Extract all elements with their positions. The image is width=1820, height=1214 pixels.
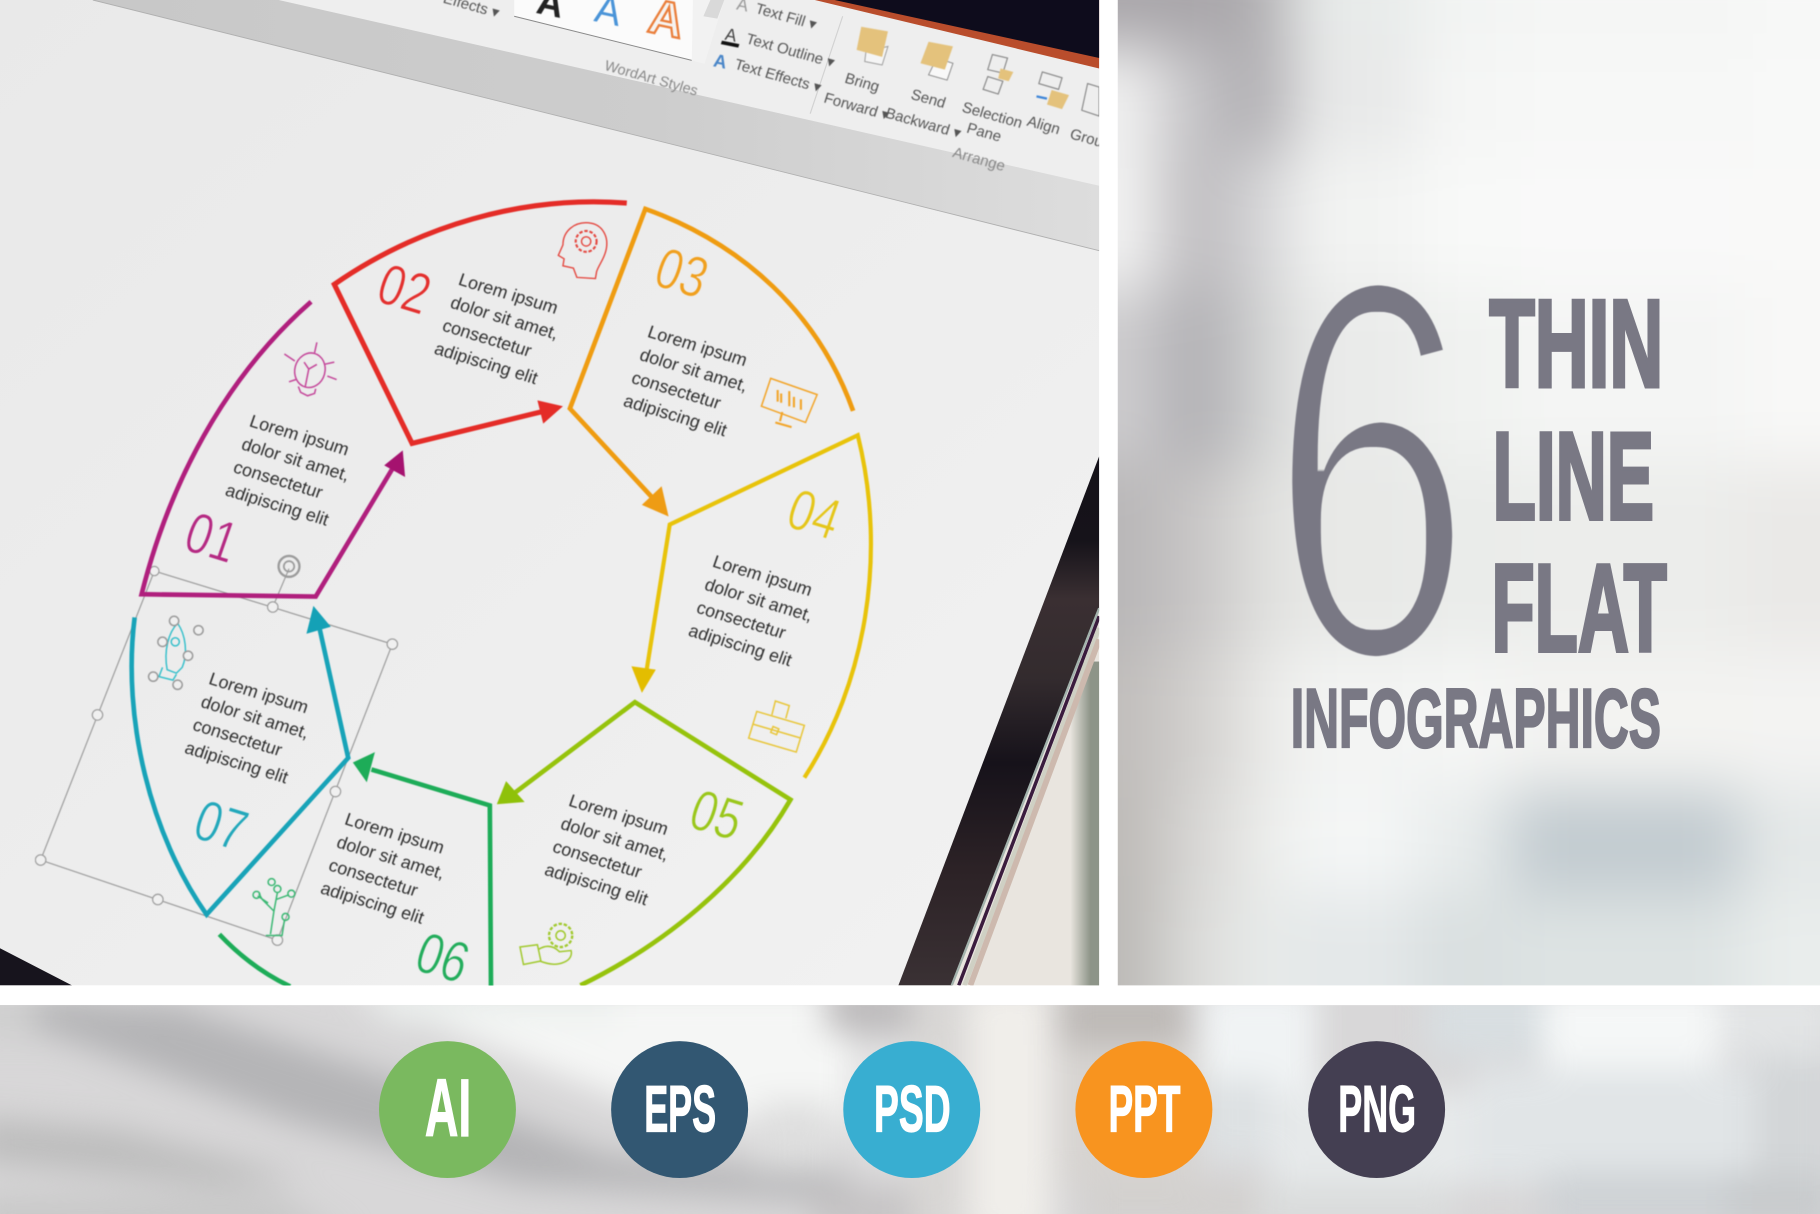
segment 07 teal: dolor sit amet, xyxy=(198,692,312,743)
segment 07 teal: 07 xyxy=(186,788,255,864)
segment 06 green: consectetur xyxy=(326,855,421,900)
segment 04 yellow: 04 xyxy=(779,477,849,553)
segment 06 green: dolor sit amet, xyxy=(334,832,448,883)
badge: AI xyxy=(379,1041,516,1178)
segment 01 magenta: adipiscing elit xyxy=(223,480,332,530)
badge: EPS xyxy=(611,1041,748,1178)
monitor bezel xyxy=(0,456,1099,987)
badge: AI: AI xyxy=(425,1063,471,1154)
segment 07 teal: Lorem ipsum xyxy=(206,668,311,717)
segment 07 teal xyxy=(132,606,348,915)
ribbon toolbar: WordArt Styles xyxy=(602,58,700,99)
badge: PPT: PPT xyxy=(1108,1073,1180,1147)
segment 07 teal: adipiscing elit xyxy=(182,738,291,787)
selection box xyxy=(35,556,398,945)
segment 05 lime: dolor sit amet, xyxy=(558,813,672,865)
cycle diagram xyxy=(35,202,871,996)
segment 02 red: consectetur xyxy=(440,315,534,361)
segment 03 orange: consectetur xyxy=(629,367,724,413)
segment 03 orange xyxy=(570,209,853,516)
icon: rocket with handles xyxy=(149,616,203,689)
ribbon toolbar: Bring xyxy=(843,70,882,96)
segment 07 teal: consectetur xyxy=(190,715,285,760)
segment 04 yellow: dolor sit amet, xyxy=(702,574,815,625)
segment 03 orange: 03 xyxy=(647,236,716,312)
segment 05 lime: consectetur xyxy=(550,836,645,882)
ribbon toolbar xyxy=(93,0,1113,251)
ribbon toolbar: Send xyxy=(909,86,948,112)
ribbon toolbar: Text Effects ▾ xyxy=(732,56,824,97)
segment 02 red: 02 xyxy=(369,252,439,328)
icon: head with gear xyxy=(558,223,607,279)
panel: screen photo xyxy=(0,0,1113,996)
badge: PNG xyxy=(1308,1041,1445,1178)
ribbon toolbar: Group xyxy=(1068,126,1113,153)
segment 04 yellow: adipiscing elit xyxy=(686,620,795,670)
ribbon toolbar: Text Outline ▾ xyxy=(744,31,837,72)
ribbon toolbar: A xyxy=(712,49,729,73)
segment 03 orange: dolor sit amet, xyxy=(637,344,750,396)
ribbon toolbar: Selection xyxy=(960,99,1024,132)
icon: briefcase xyxy=(749,701,804,752)
segment 04 yellow: consectetur xyxy=(694,597,789,643)
badge: PPT xyxy=(1075,1041,1212,1178)
segment 01 magenta: 01 xyxy=(177,501,246,576)
icon: hand with gear xyxy=(520,924,572,964)
segment 02 red: dolor sit amet, xyxy=(448,292,561,343)
format badges xyxy=(379,1041,1445,1178)
heading: big numeral 6: 6 xyxy=(1271,168,1471,772)
segment 05 lime: Lorem ipsum xyxy=(566,790,671,839)
segment 02 red: Lorem ipsum xyxy=(456,269,561,318)
segment 01 magenta: Lorem ipsum xyxy=(247,411,352,459)
segment 04 yellow: Lorem ipsum xyxy=(710,551,815,600)
ribbon toolbar: Pane xyxy=(965,120,1003,146)
segment 06 green xyxy=(219,752,491,996)
panel: blurred background bottom strip xyxy=(0,987,1820,1214)
heading: thin line flat infographics: LINE xyxy=(1493,408,1654,546)
panel: blurred background right xyxy=(1118,0,1820,986)
segment 01 magenta xyxy=(142,302,405,597)
ribbon toolbar: Backward ▾ xyxy=(883,105,964,142)
segment 06 green: 06 xyxy=(408,921,477,996)
segment 06 green: Lorem ipsum xyxy=(342,809,447,858)
segment 01 magenta: consectetur xyxy=(231,457,325,502)
ribbon toolbar: Align xyxy=(1025,113,1062,138)
segment 03 orange: adipiscing elit xyxy=(621,390,730,440)
ribbon toolbar: A xyxy=(723,24,739,46)
segment 05 lime: adipiscing elit xyxy=(542,859,651,909)
segment 05 lime: 05 xyxy=(682,778,751,854)
ribbon toolbar: Arrange xyxy=(951,144,1007,175)
icon: monitor chart xyxy=(761,378,817,427)
heading: thin line flat infographics: FLAT xyxy=(1492,540,1667,678)
ribbon toolbar: Text Fill ▾ xyxy=(753,0,819,34)
segment 05 lime xyxy=(497,702,790,985)
badge: PNG: PNG xyxy=(1338,1073,1416,1147)
icon: light bulb xyxy=(284,342,337,396)
segment 06 green: adipiscing elit xyxy=(318,878,427,928)
badge: PSD: PSD xyxy=(874,1073,951,1147)
icon: network tree xyxy=(253,879,295,935)
heading: thin line flat infographics: THIN xyxy=(1489,275,1663,413)
heading: thin line flat infographics xyxy=(1291,275,1667,765)
badge: PSD xyxy=(843,1041,980,1178)
segment 03 orange: Lorem ipsum xyxy=(645,321,750,370)
segment 01 magenta: dolor sit amet, xyxy=(239,434,352,485)
ribbon toolbar: Forward ▾ xyxy=(822,90,892,124)
segment 04 yellow xyxy=(631,435,871,778)
segment 02 red: adipiscing elit xyxy=(432,338,541,388)
badge: EPS: EPS xyxy=(644,1073,716,1147)
segment 02 red xyxy=(334,202,627,443)
